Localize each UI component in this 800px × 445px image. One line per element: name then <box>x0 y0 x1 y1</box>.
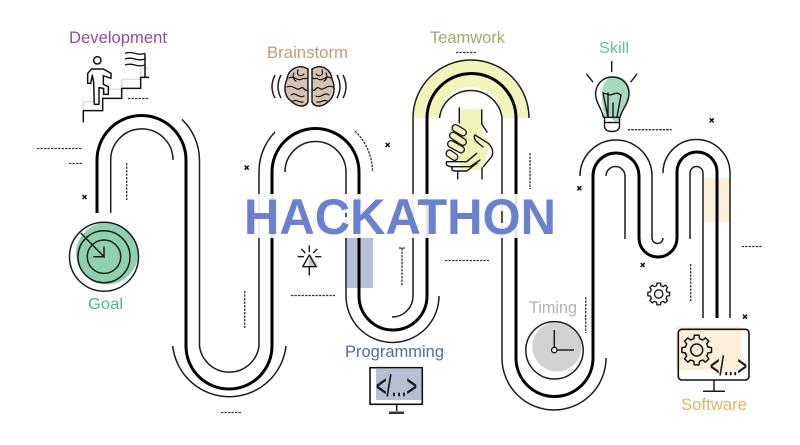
icon: software monitor <box>676 326 749 391</box>
icon: handshake <box>446 108 493 179</box>
title backing halo <box>239 194 561 238</box>
road segments visible through the title <box>346 211 502 223</box>
yellow arch highlight: teamwork <box>413 60 529 118</box>
title: HACKATHON <box>244 189 556 245</box>
icon: light bulb <box>587 62 637 132</box>
beige highlight block: software <box>703 178 730 222</box>
label: skill: Skill <box>599 40 629 57</box>
icon: brain <box>272 67 346 106</box>
road centre thick line <box>97 74 717 396</box>
label: development: Development <box>69 29 167 47</box>
icon: software monitor: </...> <box>710 351 747 381</box>
label: timing: Timing <box>529 299 577 317</box>
icon: person climbing stairs <box>83 52 149 122</box>
icon: programming monitor: </...> <box>376 371 417 403</box>
dashed accent lines and small crosses <box>37 52 763 412</box>
icon: goal target <box>70 222 138 291</box>
icon: clock <box>526 322 583 379</box>
icon: programming monitor <box>370 368 422 414</box>
blue highlight block: programming <box>346 228 373 288</box>
label: teamwork: Teamwork <box>430 29 506 47</box>
label: goal: Goal <box>88 296 123 313</box>
label: programming: Programming <box>345 343 444 361</box>
winding road <box>97 60 730 410</box>
label: brainstorm: Brainstorm <box>267 44 348 62</box>
icon: diode spark <box>298 246 321 275</box>
label: software: Software <box>681 396 747 414</box>
icon: small gear <box>648 283 670 305</box>
road thin edge lines <box>111 60 730 410</box>
